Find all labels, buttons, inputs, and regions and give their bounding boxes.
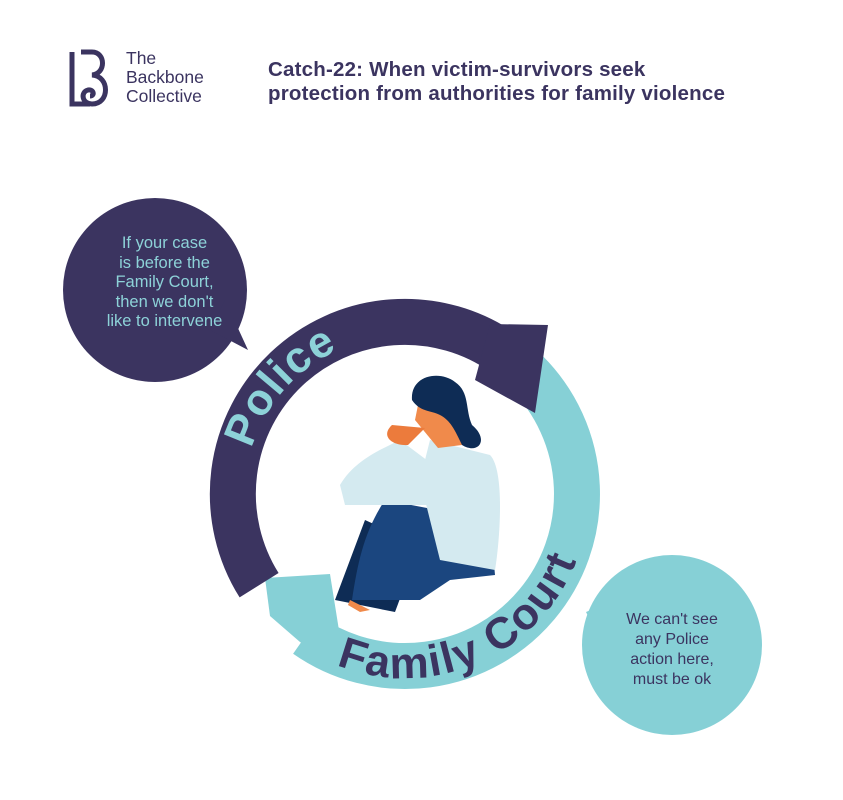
logo text bbox=[126, 48, 204, 106]
title: Catch-22: When victim-survivors seek bbox=[268, 58, 645, 81]
bubble text: family court bbox=[626, 611, 718, 688]
bubble text: police: then we don't bbox=[116, 292, 213, 310]
bubble text: family court: any Police bbox=[635, 631, 709, 648]
arrow: family court bbox=[266, 356, 600, 689]
logo text: Backbone bbox=[126, 67, 204, 87]
bubble text: police: like to intervene bbox=[107, 312, 222, 330]
arrow: police bbox=[210, 298, 548, 598]
label: Police: Police bbox=[224, 333, 333, 446]
bubble text: family court: action here, bbox=[630, 651, 714, 668]
title bbox=[268, 58, 725, 105]
icon: logo B bbox=[70, 50, 108, 106]
logo text: The bbox=[126, 48, 156, 68]
bubble text: police bbox=[107, 234, 222, 330]
bubble text: police: is before the bbox=[119, 254, 210, 272]
logo text: Collective bbox=[126, 86, 202, 106]
illustration: seated woman bbox=[335, 376, 500, 612]
bubble text: family court: must be ok bbox=[633, 671, 711, 688]
bubble text: police: If your case bbox=[122, 234, 207, 252]
speech bubble: police bbox=[63, 198, 248, 382]
label: Family Court: Family Court bbox=[339, 552, 576, 678]
bubble text: police: Family Court, bbox=[115, 273, 214, 291]
logo bbox=[70, 48, 204, 106]
bubble text: family court: We can't see bbox=[626, 611, 718, 628]
speech bubble: family court bbox=[582, 555, 762, 735]
title: protection from authorities for family violence bbox=[268, 82, 725, 105]
